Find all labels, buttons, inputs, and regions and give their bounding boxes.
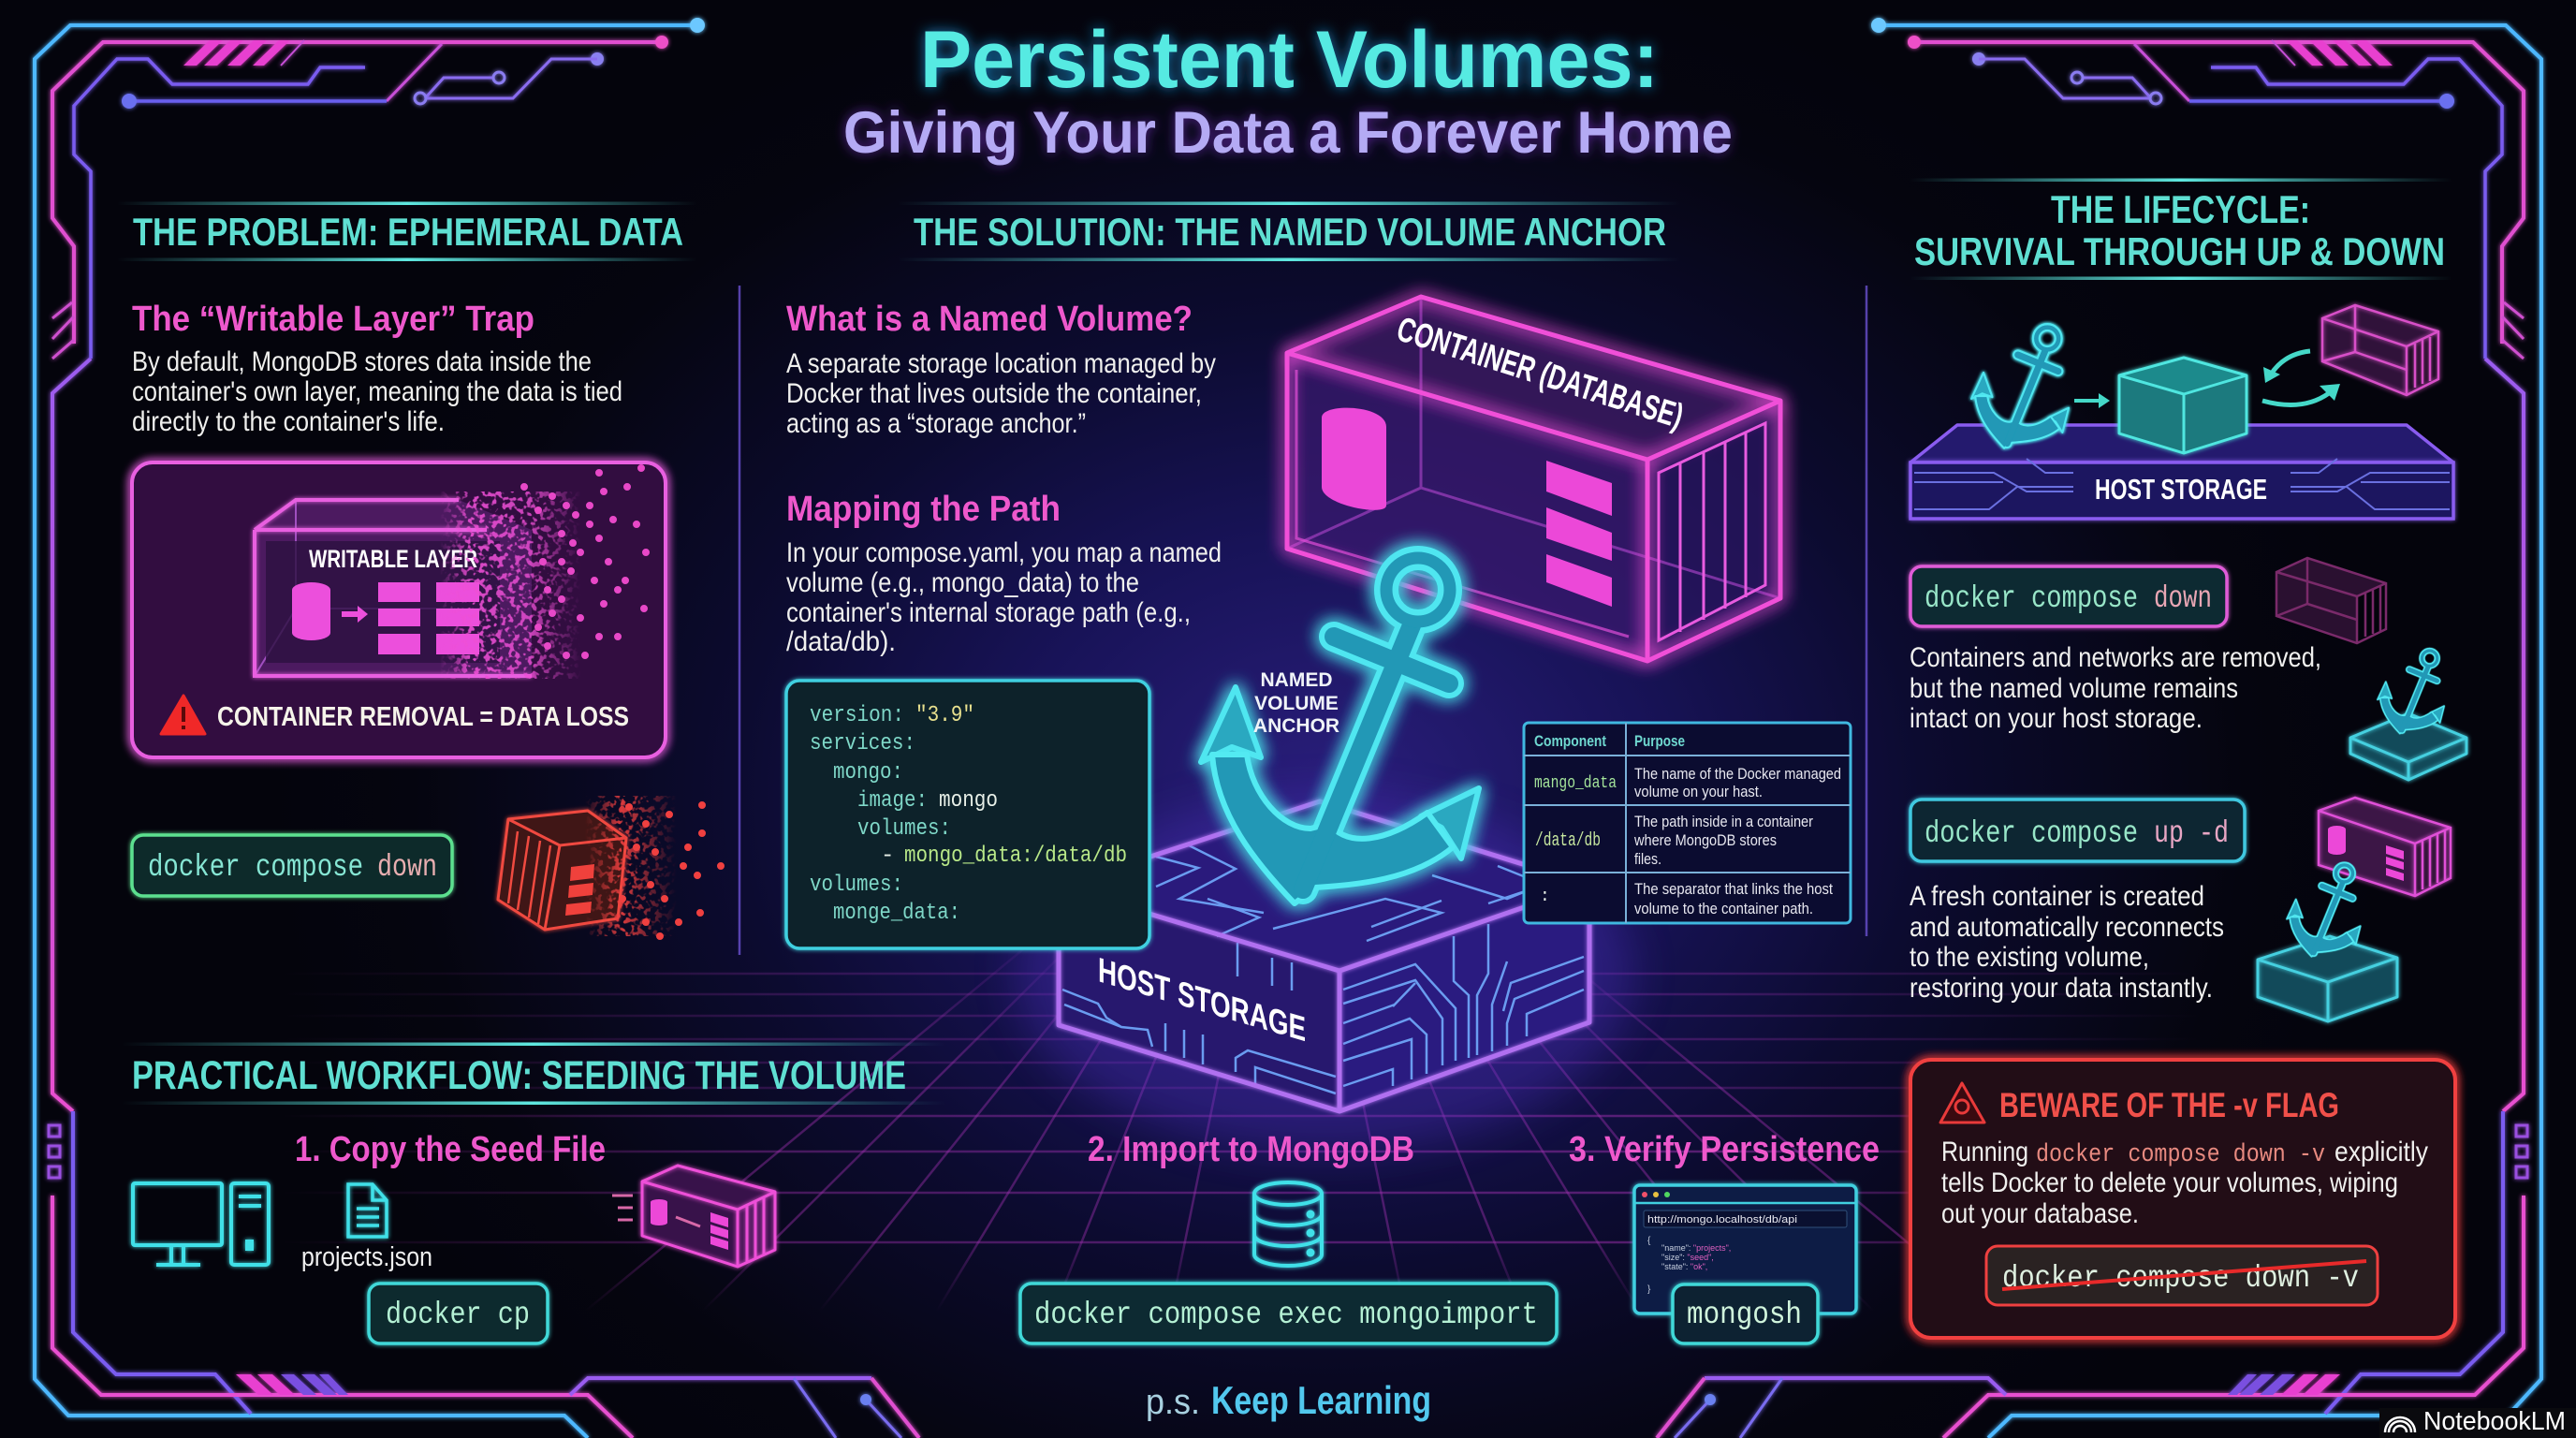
writable layer cube [255,500,532,676]
footer: p.s. keep learning: p.s. [1146,1383,1200,1422]
warning icon [161,696,205,734]
code block: compose.yaml: "3.9" [915,703,974,728]
warning text: docker compose down -v [2036,1141,2325,1169]
step 1: copy the seed file: 1. Copy the Seed File [295,1130,606,1169]
data loss label: CONTAINER REMOVAL = DATA LOSS [217,702,629,732]
step 1: copy the seed file [133,1130,775,1343]
code block: compose.yaml [786,681,1149,948]
what is a named volume text: Docker that lives outside the container, [786,378,1202,409]
mapping the path text: Mapping the Path [786,490,1061,529]
command: docker compose up -d: up -d [2154,816,2229,851]
heading: the solution: THE SOLUTION: THE NAMED VOLUME ANCHOR [914,210,1666,254]
mapping the path text: /data/db). [786,626,896,657]
icon: browser window: "size": "seed", [1661,1253,1714,1262]
small anchor [1971,328,2069,448]
disintegrating particles [440,468,646,679]
icon: red container disintegrating [498,796,721,936]
mapping the path text: container's internal storage path (e.g., [786,597,1191,628]
what is a named volume text: What is a Named Volume? [786,300,1193,339]
table: component and purpose: files. [1634,850,1661,868]
step 3: verify persistence: 3. Verify Persistence [1569,1130,1880,1169]
anchor label: ANCHOR [1253,715,1339,737]
down explanation text: intact on your host storage. [1910,703,2203,734]
mapping the path text [786,490,1222,657]
warning text: explicitly [2334,1137,2428,1167]
host storage platform [1910,425,2453,519]
icon: anchor on box (survives) [2350,651,2466,780]
icon: fresh container with anchor on box [2258,798,2451,1021]
notebooklm watermark: NotebookLM [2423,1406,2566,1435]
command: docker compose down (lifecycle) [1910,566,2227,626]
table: component and purpose: Component [1534,732,1606,750]
table: component and purpose: where MongoDB stores [1633,831,1777,849]
icon: browser window: "name": "projects", [1661,1243,1731,1253]
table: component and purpose: volume to the container path. [1634,900,1813,917]
notebooklm watermark [2379,1406,2576,1438]
faded pink container [2322,305,2438,395]
icon: computer [133,1183,269,1265]
code block: compose.yaml: image: [857,788,928,814]
icon: removed container [2276,558,2386,643]
code block: compose.yaml: services: [810,731,915,756]
table: component and purpose: mango_data [1534,774,1617,793]
writable layer trap text: The “Writable Layer” Trap [132,300,534,339]
icon: database [1254,1182,1322,1266]
table: component and purpose: The path inside in a container [1634,813,1813,830]
warning text: out your database. [1941,1198,2139,1229]
warning text: tells Docker to delete your volumes, wiping [1941,1167,2398,1198]
code block: compose.yaml: monge_data: [833,901,960,926]
heading: the lifecycle: SURVIVAL THROUGH UP & DOWN [1914,229,2445,273]
step 3: verify persistence [1569,1130,1880,1343]
code block: compose.yaml: volumes: [810,873,903,898]
heading: the lifecycle [1914,187,2445,273]
mapping the path text: volume (e.g., mongo_data) to the [786,567,1139,598]
command: docker compose up -d [1910,800,2245,861]
code block: compose.yaml: mongo_data:/data/db [904,844,1127,869]
panel: beware of the -v flag [1910,1060,2455,1338]
title [843,15,1733,166]
command: docker cp [369,1284,548,1343]
file name: projects.json [301,1242,432,1272]
footer: p.s. keep learning: Keep Learning [1211,1378,1431,1422]
arrow to volume [2074,393,2110,408]
icon: browser window [1634,1185,1856,1313]
code block: compose.yaml: mongo [939,788,998,814]
circuit frame: right half [1657,18,2541,1438]
icon: browser window: "state": "ok", [1661,1262,1707,1271]
host storage platform: HOST STORAGE [2095,473,2267,506]
table: component and purpose: volume on your hast. [1634,783,1763,800]
anchor label [1253,669,1339,737]
down explanation text: but the named volume remains [1910,673,2238,704]
code block: compose.yaml: - [881,844,894,869]
data blocks [1546,461,1612,607]
command: mongoimport: docker compose exec mongoimport [1034,1298,1538,1332]
command: docker compose up -d: docker compose [1925,816,2138,851]
struck-out command [1986,1246,2378,1305]
heading: practical workflow: PRACTICAL WORKFLOW: SEEDING THE VOLUME [132,1053,906,1098]
up explanation text: A fresh container is created [1910,881,2204,912]
command: mongoimport [1020,1284,1557,1343]
title: Persistent Volumes: [920,15,1659,105]
circuit traces [1062,845,1584,1093]
up explanation text: and automatically reconnects [1910,912,2224,943]
table: component and purpose: The separator that links the host [1634,880,1833,898]
code block: compose.yaml: mongo: [833,760,903,785]
icon: browser window: } [1647,1284,1651,1295]
database and data blocks [292,582,479,654]
command: docker compose down (lifecycle): down [2154,581,2212,616]
down explanation text [1910,642,2321,734]
code block: compose.yaml: version: [810,703,904,728]
command: docker compose down (lifecycle): docker compose [1925,581,2138,616]
up explanation text: restoring your data instantly. [1910,973,2213,1004]
icon: named volume anchor [1201,558,1479,903]
heading: the problem: THE PROBLEM: EPHEMERAL DATA [133,210,683,254]
icon: document [348,1184,387,1237]
host storage label: HOST STORAGE [1098,951,1306,1049]
mapping the path text: In your compose.yaml, you map a named [786,537,1222,568]
perspective floor grid [281,936,2200,1311]
icon: browser window: http://mongo.localhost/db/api [1647,1214,1797,1225]
what is a named volume text [786,300,1216,439]
command: mongosh: mongosh [1687,1298,1802,1332]
anchor label: VOLUME [1254,693,1339,714]
warning text: Running [1941,1137,2028,1167]
title: Giving Your Data a Forever Home [843,100,1733,166]
writable layer label: WRITABLE LAYER [309,545,477,573]
writable layer trap text: directly to the container's life. [132,406,445,437]
footer: p.s. keep learning [1146,1378,1431,1422]
section rules [117,178,2452,1105]
step 2: import to mongodb: 2. Import to MongoDB [1088,1130,1414,1169]
container: database [1287,297,1780,661]
writable layer trap text: container's own layer, meaning the data is tied [132,376,622,407]
command: docker compose down: docker compose [148,850,363,885]
writable layer trap text: By default, MongoDB stores data inside the [132,346,592,377]
circuit frame: left half [35,18,919,1438]
step 2: import to mongodb [1020,1130,1557,1343]
icon: biohazard warning [1940,1083,1984,1123]
icon: browser window: { [1647,1236,1651,1246]
up explanation text [1910,881,2224,1004]
what is a named volume text: acting as a “storage anchor.” [786,408,1086,439]
table: component and purpose [1524,723,1851,923]
warning heading: BEWARE OF THE -v FLAG [1999,1086,2339,1124]
warning text [1941,1137,2428,1229]
anchor label: NAMED [1260,669,1333,691]
icon: pink container [612,1166,775,1267]
column dividers [739,286,1866,955]
command: mongosh [1673,1284,1818,1343]
host storage block [1016,796,1633,1152]
down explanation text: Containers and networks are removed, [1910,642,2321,673]
database cylinder [1322,408,1386,510]
volume cube [2119,358,2247,453]
struck-out command: docker compose down -v [2002,1261,2359,1296]
command: docker cp: docker cp [386,1298,530,1332]
up explanation text: to the existing volume, [1910,942,2149,973]
container label: CONTAINER (DATABASE) [1393,310,1688,435]
table: component and purpose: Purpose [1634,732,1685,750]
what is a named volume text: A separate storage location managed by [786,348,1216,379]
command: docker compose down: down [377,850,437,885]
cycle arrows [2262,351,2340,404]
panel: writable layer data loss [132,462,666,757]
code block: compose.yaml: volumes: [857,816,951,842]
table: component and purpose: The name of the Docker managed [1634,765,1841,783]
table: component and purpose: /data/db [1535,830,1601,852]
lifecycle illustration [1910,305,2453,519]
writable layer trap text [132,300,622,437]
heading: the lifecycle: THE LIFECYCLE: [2051,187,2310,231]
table: component and purpose: : [1540,888,1550,906]
command: docker compose down [132,835,452,896]
